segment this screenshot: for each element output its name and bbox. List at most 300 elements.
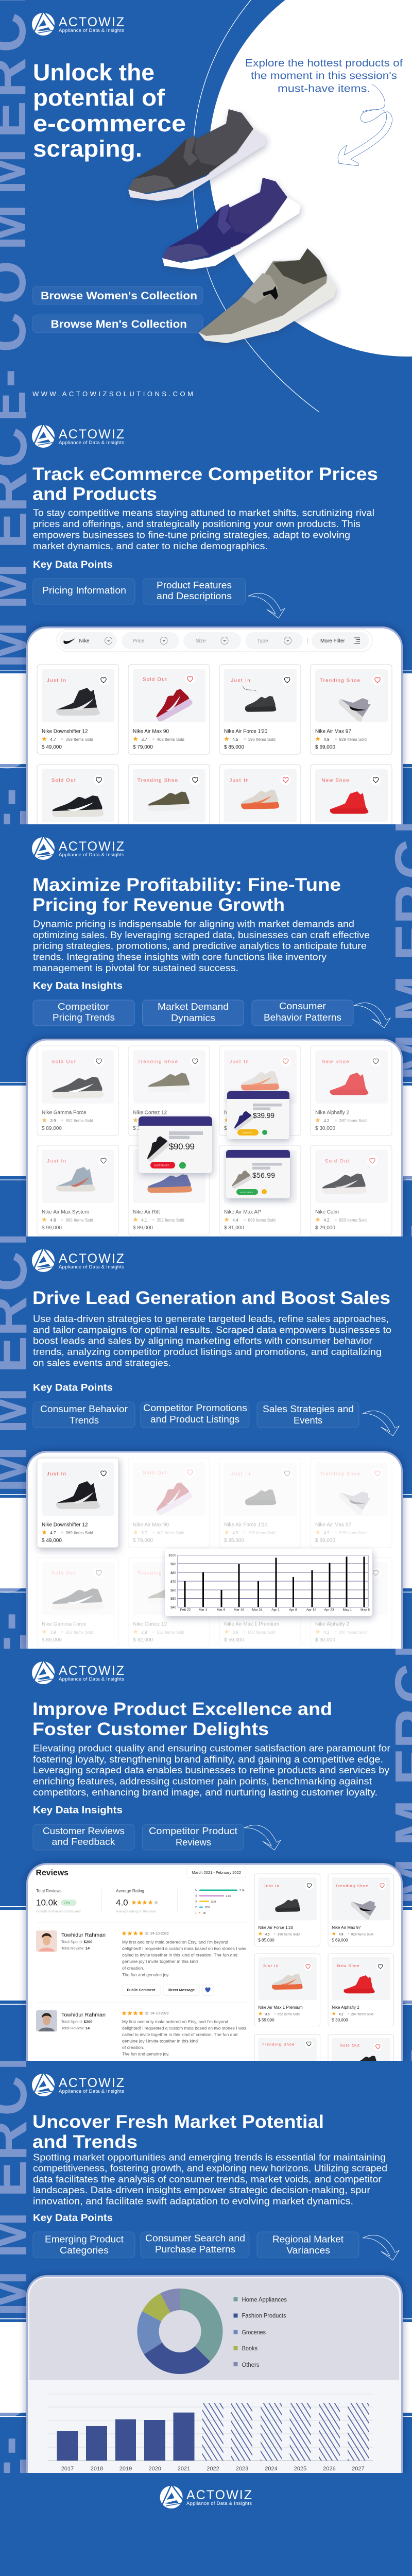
data point: consumer search xyxy=(141,2232,249,2258)
product card: Nike Gamma Force: 3.9 xyxy=(50,1118,56,1123)
section: track competitor prices xyxy=(0,412,412,824)
product card: sold out shoe xyxy=(328,2034,394,2107)
button: men's collection: Browse Men's Collection xyxy=(50,318,187,330)
button: women's collection: Browse Women's Collection xyxy=(41,290,197,302)
price history bar chart: Apr 1 xyxy=(271,1608,280,1612)
review 1: Towhidur Rahman xyxy=(61,1933,106,1938)
filter bar: Price xyxy=(133,638,145,644)
bar chart: 2023 xyxy=(236,2466,248,2472)
body text: trends. Integrating these insights with core functions like inventory xyxy=(33,951,327,962)
data point: regional variances: Variances xyxy=(286,2245,330,2256)
price history bar chart: Mar 1 xyxy=(199,1608,208,1612)
product card: Nike Air Max 97: 929 Items Sold xyxy=(339,737,367,742)
heading: Track eCommerce Competitor Prices xyxy=(32,464,378,484)
product card: Nike Air Force 1'20: Nike Air Force 1'20 xyxy=(224,1522,268,1528)
price popup: good price: $56.99 xyxy=(252,1171,275,1179)
product card: Nike Air Max 90: $ 79,000 xyxy=(133,1538,153,1544)
data point: competitor promotions xyxy=(141,1402,249,1428)
body text: Use data-driven strategies to generate targeted leads, refine sales approaches, xyxy=(33,1313,389,1324)
body text: pricing strategies, promotions, and predictive analytics to anticipate future xyxy=(33,940,367,951)
date filter: March 2021 - February 2022 xyxy=(192,1870,241,1875)
product card: Nike Alphafly 2 xyxy=(310,765,392,824)
price history bar chart: $70 xyxy=(170,1580,176,1584)
product card: Nike Air Max 90: Nike Air Max 90 xyxy=(133,1522,169,1528)
product card: Nike Gamma Force: Sold Out xyxy=(52,1059,76,1064)
body text: management is pivotal for sustained success. xyxy=(33,962,238,973)
product card: Nike Air Max 90 xyxy=(128,1458,210,1548)
reviews panel xyxy=(26,1863,403,2107)
avatar xyxy=(36,2010,57,2031)
price history bar chart: Apr 23 xyxy=(324,1608,334,1612)
product card: Nike Air Max System: 965 Items Sold xyxy=(66,1218,93,1223)
icon: shoe xyxy=(52,1588,104,1610)
data point: competitor promotions: Competitor Promotions xyxy=(143,1402,247,1413)
product card: Nike Air Max 1 Premium: $ 59,000 xyxy=(258,2018,274,2023)
product card: Nike Alphafly 2 xyxy=(311,1046,392,1136)
logo: Appliance of Data & Insights xyxy=(59,852,124,858)
product card: Nike Downshifter 12 highlighted: 4.7 xyxy=(50,1531,56,1535)
product card: Nike Alphafly 2: $ 30,000 xyxy=(315,1126,335,1131)
data point: product features xyxy=(143,579,245,604)
data insight: market demand: Dynamics xyxy=(171,1012,215,1023)
product card: Nike Calm: 4.2 xyxy=(323,1218,330,1223)
avatar xyxy=(36,1930,57,1952)
stat: total reviews: 10.0k xyxy=(36,1898,58,1907)
product card: Nike Calm xyxy=(311,1145,392,1235)
stat: average rating xyxy=(116,1889,177,1913)
body text: Leveraging scraped data enables businesses to refine products and services by xyxy=(33,1765,390,1775)
icon: shoe xyxy=(156,689,193,721)
review 2: Total Spend: $200 xyxy=(61,2020,92,2024)
data point: emerging categories: Emerging Product xyxy=(45,2234,124,2244)
product card: Nike Air Max System: 4.8 xyxy=(50,1218,56,1223)
product card: Nike Air Max AP: $ 81,000 xyxy=(224,1225,244,1231)
data insight: consumer behavior: Consumer xyxy=(279,1001,326,1011)
icon: shoe xyxy=(344,1975,375,1993)
body text xyxy=(33,1742,390,1798)
product card: Nike Gamma Force: Nike Gamma Force xyxy=(42,1622,87,1627)
product card: Nike Downshifter 12 xyxy=(37,665,118,754)
product card: Nike Air Max 1 Premium xyxy=(219,1046,301,1136)
product card: Nike Cortez 12: 2.9 xyxy=(141,1118,147,1123)
rating breakdown: 3 xyxy=(195,1900,197,1903)
legend: Home Appliances xyxy=(242,2297,287,2303)
body text: prices and offerings, and strategically positioning your own products. This xyxy=(33,518,360,529)
review 1: called to invite together in this kind of creation. The fun and xyxy=(122,1953,237,1958)
review 2: of creation. xyxy=(122,2045,144,2050)
bar chart: 2021 xyxy=(178,2466,190,2472)
product card: Nike Air Max 90: 402 Items Sold xyxy=(157,737,184,742)
price history bar chart: Mar 24 xyxy=(252,1608,263,1612)
body text xyxy=(33,1313,391,1368)
product card: Nike Air Force 1'20: 196 Items Sold xyxy=(278,1933,300,1936)
hero intro text xyxy=(245,58,403,95)
body text: Spotting market opportunities and emerging trends is essential for maintaining xyxy=(33,2151,386,2163)
product card: Nike Downshifter 12: 4.7 xyxy=(50,737,56,742)
price history bar chart: Apr 8 xyxy=(289,1608,297,1612)
product card: Nike Cortez 12: $ 32,000 xyxy=(133,1126,153,1131)
product card: Nike Air Max 1 Premium xyxy=(219,1557,301,1647)
product card: sold out shoe: Sold Out xyxy=(340,2043,359,2048)
logo: ACTOWIZ xyxy=(59,427,124,442)
product card: Nike Cortez 12: $ 32,000 xyxy=(133,1637,153,1643)
product card: Nike Air Max AP: 4.4 xyxy=(233,1218,238,1223)
review 1: Total Spend: $200 xyxy=(61,1939,92,1944)
body text: data facilitates the analysis of consumer trends, market voids, and competitor xyxy=(33,2174,382,2184)
hero title: Unlock the xyxy=(33,59,154,86)
review 2: delighted! I requested a custom mala based on two stones I was xyxy=(122,2026,246,2031)
legend: Books xyxy=(242,2346,258,2352)
shoe: grey trainer xyxy=(198,248,336,343)
product card: Nike Air Rift xyxy=(128,1145,210,1235)
product card: Nike Cortez 12 xyxy=(128,1046,210,1136)
stat: average rating: Average Rating xyxy=(116,1889,144,1893)
price history bar chart: $80 xyxy=(170,1571,176,1575)
product card: Nike Air Max System: Nike Air Max System xyxy=(42,1210,89,1215)
product card: Nike Air Max 90: Sold Out xyxy=(143,677,167,682)
icon: shoe xyxy=(56,1167,95,1192)
body text xyxy=(33,918,370,973)
product card: Nike Air Max 97: Trending Shoe xyxy=(336,1884,368,1888)
product card: Nike Cortez 12: Trending Shoe xyxy=(138,1059,178,1064)
side bands xyxy=(0,1494,412,1592)
product card: Nike Air Max 1 Premium: Nike Air Max 1 Premium xyxy=(224,1622,279,1627)
price popup: good price xyxy=(226,1150,290,1198)
key data heading: Key Data Insights xyxy=(33,1805,123,1816)
hero title: e-commerce xyxy=(33,110,186,137)
product card: Nike Air Max 97 xyxy=(311,665,392,754)
rating breakdown: 1.0k xyxy=(226,1895,231,1898)
review 1: 24-10-2022 xyxy=(150,1932,169,1936)
logo: Appliance of Data & Insights xyxy=(59,2089,124,2094)
price popup: good price: GOOD PRICE xyxy=(240,1191,253,1193)
product card: Nike Air Force 1'20: 4.5 xyxy=(233,1531,238,1535)
data point: consumer behavior trends xyxy=(33,1402,135,1428)
body text: and tailor campaigns for optimal results. Scraped data empowers businesses to xyxy=(33,1324,391,1335)
heading: and Products xyxy=(32,484,157,504)
data insight: competitor reviews: Competitor Product xyxy=(149,1825,237,1836)
product card: Nike Gamma Force: 952 Items Sold xyxy=(66,1118,93,1123)
price history bar chart: Mar 8 xyxy=(217,1608,226,1612)
product card: Nike Alphafly 2: Nike Alphafly 2 xyxy=(315,1622,350,1627)
body text: optimizing sales. By leveraging scraped data, businesses can craft effective xyxy=(33,929,370,940)
logo xyxy=(32,837,124,860)
product card: Nike Air Force 1'20: Just In xyxy=(264,1884,279,1888)
data point: emerging categories: Categories xyxy=(60,2245,109,2256)
review 2: Towhidur Rahman xyxy=(61,2012,106,2018)
data insight: competitor reviews xyxy=(142,1824,244,1850)
shoe: purple slip-on xyxy=(162,178,300,269)
product card: Nike Cortez 12: Trending Shoe xyxy=(138,1570,178,1577)
review 1: Total Review: 14 xyxy=(61,1946,90,1951)
product card: Nike Gamma Force xyxy=(37,765,118,824)
product card: Nike Alphafly 2: $ 30,000 xyxy=(332,2018,348,2023)
product card: Nike Air Force 1'20: 4.5 xyxy=(265,1933,270,1936)
product card: Nike Alphafly 2: New Shoe xyxy=(321,1059,349,1064)
product card: Nike Gamma Force: Nike Gamma Force xyxy=(42,1110,87,1116)
product card: Nike Cortez 12: Trending Shoe xyxy=(138,778,178,783)
logo: ACTOWIZ xyxy=(59,2076,124,2090)
logo xyxy=(32,1662,124,1684)
product card: Nike Air Max 1 Premium: 3.6 xyxy=(233,1118,238,1123)
price popup: overpriced: $90.99 xyxy=(169,1142,195,1151)
bar chart: 2017 xyxy=(61,2466,74,2472)
product card: Nike Air Max 1 Premium: $ 59,000 xyxy=(224,1637,244,1643)
heading: Improve Product Excellence and xyxy=(32,1699,332,1719)
bar chart: 2026 xyxy=(323,2466,336,2472)
price history bar chart: May 8 xyxy=(360,1608,370,1612)
body text xyxy=(33,2151,387,2206)
product card: Nike Air Max System: $ 99,000 xyxy=(42,1225,62,1231)
bar chart: 2018 xyxy=(91,2466,103,2472)
product card: Nike Air Max 97: Nike Air Max 97 xyxy=(332,1925,361,1930)
body text: Dynamic pricing is indispensable for aligning with market demands and xyxy=(33,918,354,929)
product card: Nike Gamma Force: $ 89,000 xyxy=(42,1126,62,1131)
product card: Nike Alphafly 2: New Shoe xyxy=(337,1963,359,1968)
product card: Nike Alphafly 2: Nike Alphafly 2 xyxy=(332,2005,359,2010)
icon: shoe xyxy=(337,1479,375,1516)
product card: Nike Air Force 1'20: Nike Air Force 1'20 xyxy=(224,728,268,735)
product card: Nike Air Max 90: $ 79,000 xyxy=(133,744,153,750)
product card: Nike Air Force 1'20: $ 85,000 xyxy=(258,1938,274,1943)
product card: Nike Downshifter 12: Nike Downshifter 12 xyxy=(42,728,88,735)
logo: ACTOWIZ xyxy=(59,1251,124,1266)
product card: Nike Air Max 97: 4.9 xyxy=(339,1933,344,1936)
product card: Nike Air Rift: Nike Air Rift xyxy=(133,1210,160,1215)
product card: Nike Calm: 953 Items Sold xyxy=(339,1218,367,1223)
product card: Nike Gamma Force: $ 89,000 xyxy=(42,1637,62,1643)
key data heading: Key Data Insights xyxy=(33,981,123,991)
product card: Nike Cortez 12: 532 Items Sold xyxy=(157,1630,184,1635)
product card: Nike Downshifter 12 highlighted: 369 Items Sold xyxy=(66,1531,93,1535)
data point: consumer search: Purchase Patterns xyxy=(155,2244,235,2255)
product card: Nike Air Max 97: 929 Items Sold xyxy=(339,1531,367,1535)
product card: Nike Downshifter 12 highlighted: Nike Downshifter 12 xyxy=(42,1522,88,1528)
date filter xyxy=(187,1867,246,1878)
body text: empowers businesses to fine-tune pricing strategies, adapt to evolving xyxy=(33,530,350,540)
filter bar: Size xyxy=(196,638,206,644)
heading xyxy=(32,875,341,915)
side bands xyxy=(0,670,412,768)
filter bar: Type xyxy=(257,638,268,644)
review 1 xyxy=(36,1930,246,1996)
product card: Nike Air Force 1'20: $ 85,000 xyxy=(224,1538,244,1544)
icon: shoe xyxy=(330,1073,368,1095)
product card: Nike Calm: Sold Out xyxy=(325,1158,349,1164)
heading xyxy=(32,1699,332,1739)
icon: shoe xyxy=(350,1891,380,1921)
stat: total reviews xyxy=(36,1889,102,1913)
data point: product features: Product Features xyxy=(157,580,232,590)
data insight: consumer behavior xyxy=(252,1000,353,1026)
body text: competitors, enhancing brand image, and nurturing lasting customer loyalty. xyxy=(33,1787,377,1798)
product card: Nike Air Max 97: Trending Shoe xyxy=(320,1471,360,1477)
stat: total reviews: 21% xyxy=(64,1902,71,1905)
data insight: customer reviews: and Feedback xyxy=(52,1836,115,1847)
icon: shoe xyxy=(148,791,191,811)
data insight: competitor pricing: Competitor xyxy=(58,1001,109,1012)
product card: Nike Air Force 1'20: 4.5 xyxy=(233,737,238,742)
product card: Nike Air Max 97: 929 Items Sold xyxy=(351,1933,373,1936)
product panel xyxy=(26,1039,403,1236)
price history bar chart: Apr 16 xyxy=(306,1608,316,1612)
data point: sales strategies xyxy=(257,1402,359,1428)
product card: Nike Air Max 1 Premium: 652 Items Sold xyxy=(248,1630,276,1635)
hero title xyxy=(33,59,186,162)
product card: Nike Air Force 1'20: Nike Air Force 1'20 xyxy=(258,1925,294,1930)
product card: Nike Downshifter 12 highlighted xyxy=(37,1458,118,1548)
icon: shoe xyxy=(148,1073,191,1092)
product card: Nike Alphafly 2: Nike Alphafly 2 xyxy=(315,1110,350,1116)
icon: shoe xyxy=(245,1489,276,1505)
icon: shoe xyxy=(148,1585,191,1604)
icon: curly arrow xyxy=(338,84,392,166)
logo: ACTOWIZ xyxy=(59,15,124,29)
logo xyxy=(160,2486,252,2509)
data point: competitor promotions: and Product Listings xyxy=(150,1414,239,1425)
data insight: competitor pricing: Pricing Trends xyxy=(53,1012,115,1023)
product card: Nike Air Force 1'20 xyxy=(219,665,301,754)
body text: To stay competitive means staying attuned to market shifts, scrutinizing rival xyxy=(33,507,374,518)
white circle backdrop xyxy=(209,0,412,357)
data insight: market demand xyxy=(142,1000,244,1026)
data insight: customer reviews: Customer Reviews xyxy=(43,1825,125,1836)
body text: competitiveness, fostering growth, and exploring new horizons. Utilizing scraped xyxy=(33,2163,387,2173)
product card: Nike Downshifter 12: $ 49,000 xyxy=(42,744,62,750)
body text: trends, analyzing competitor product listings and promotions, and capitalizing xyxy=(33,1346,382,1357)
arrow xyxy=(248,594,285,618)
legend: Others xyxy=(242,2362,260,2368)
product card: Nike Air Max 97: 4.9 xyxy=(323,737,330,742)
heading: Uncover Fresh Market Potential xyxy=(32,2112,324,2132)
product card: Nike Air Max 97: 4.9 xyxy=(323,1531,330,1535)
section: call to action and contact xyxy=(0,2473,412,2576)
product card: Nike Downshifter 12 highlighted: $ 49,000 xyxy=(42,1538,62,1544)
logo: Appliance of Data & Insights xyxy=(186,2501,252,2506)
product card: Nike Alphafly 2: 287 Items Sold xyxy=(351,2012,373,2016)
price popup: overpriced: OVERPRICED xyxy=(154,1164,170,1166)
data insight: competitor pricing xyxy=(33,1000,134,1026)
data insight: market demand: Market Demand xyxy=(158,1001,229,1012)
product card: Nike Air Max System: Just In xyxy=(47,1158,66,1164)
product card: Nike Air Force 1'20: $ 85,000 xyxy=(224,744,244,750)
price popup: overpriced xyxy=(139,1116,212,1173)
icon: shoe xyxy=(275,1899,300,1912)
body text: fostering loyalty, strengthening brand affinity, and gaining a competitive edge. xyxy=(33,1754,383,1765)
review 2: 24-10-2022 xyxy=(150,2012,169,2015)
section: maximize profitability xyxy=(0,824,412,1236)
price history bar chart: Mar 16 xyxy=(234,1608,244,1612)
product card: Nike Air Max 1 Premium: 652 Items Sold xyxy=(248,1118,276,1123)
product panel xyxy=(26,1451,403,1649)
product card: Nike Air Max 90: 402 Items Sold xyxy=(157,1531,184,1535)
product card: Nike Air Max 1 Premium xyxy=(254,1954,320,2026)
data insight: consumer behavior: Behavior Patterns xyxy=(264,1012,341,1023)
hero intro text: must-have items. xyxy=(278,83,370,95)
product card: Nike Air Max 97: $ 69,000 xyxy=(315,744,335,750)
body text: Elevating product quality and ensuring customer satisfaction are paramount for xyxy=(33,1742,390,1754)
product card: Nike Air Max 1 Premium: Just In xyxy=(230,1059,248,1064)
donut chart xyxy=(137,2289,223,2374)
product card: Nike Gamma Force: Sold Out xyxy=(52,1570,76,1577)
product card: Nike Gamma Force: Sold Out xyxy=(52,778,76,783)
rating breakdown: 0k xyxy=(203,1912,206,1915)
product card: Nike Air Force 1'20: Just In xyxy=(231,678,250,683)
review 1: of creation. xyxy=(122,1966,144,1971)
review 1: The fun and genuine joy. xyxy=(122,1973,169,1977)
price history bar chart xyxy=(165,1549,372,1616)
hero intro text: the moment in this session's xyxy=(251,70,397,81)
product card: Nike Air Force 1'20: 196 Items Sold xyxy=(248,737,276,742)
product card: Nike Air Max 1 Premium: 3.6 xyxy=(233,1630,238,1635)
product card: Nike Downshifter 12: Just In xyxy=(47,678,66,683)
product card: Nike Alphafly 2: New Shoe xyxy=(321,1570,349,1577)
review 2: Total Review: 14 xyxy=(61,2026,90,2030)
logo: Appliance of Data & Insights xyxy=(59,28,124,33)
body text: enriching features, addressing customer pain points, benchmarking against xyxy=(33,1775,372,1787)
data point: product features: and Descriptions xyxy=(157,590,232,601)
data point: emerging categories xyxy=(33,2232,135,2258)
product card: Nike Air Max 97: Trending Shoe xyxy=(320,678,360,683)
logo xyxy=(32,13,124,36)
review 1: delighted! I requested a custom mala based on two stones I was xyxy=(122,1946,246,1951)
button: women's collection xyxy=(32,286,203,304)
product card: Nike Air Max 90: Sold Out xyxy=(143,1470,167,1476)
price history bar chart: $40 xyxy=(170,1606,176,1609)
data point: consumer behavior trends: Trends xyxy=(70,1415,99,1426)
product card: Nike Gamma Force xyxy=(37,1557,118,1647)
arrow xyxy=(354,1003,390,1028)
product card: Nike Air Max 1 Premium xyxy=(219,765,301,824)
product card: Nike Air Max 97: Nike Air Max 97 xyxy=(315,728,351,735)
product card: Nike Gamma Force: 952 Items Sold xyxy=(66,1630,93,1635)
key data heading: Key Data Points xyxy=(33,2213,113,2224)
rating breakdown: 2 xyxy=(195,1906,197,1909)
review 1: My first and only mala ordered on Etsy, and I'm beyond xyxy=(122,1940,228,1944)
icon: shoe xyxy=(56,1481,100,1509)
price popup: cheapest: $39.99 xyxy=(253,1111,274,1120)
stat: total reviews: Total Reviews xyxy=(36,1889,61,1893)
product card: Nike Alphafly 2: $ 30,000 xyxy=(315,1637,335,1643)
rating breakdown: 1 xyxy=(195,1911,197,1914)
product card: Nike Air Max System xyxy=(37,1145,118,1235)
body text xyxy=(33,507,374,551)
logo xyxy=(32,1249,124,1272)
product card: Nike Air Max 1 Premium: $ 59,000 xyxy=(224,1126,244,1131)
product card: Nike Air Max 97: $ 69,000 xyxy=(332,1938,348,1943)
price history bar chart: Feb 22 xyxy=(180,1608,191,1612)
product card: Nike Air Max 97 xyxy=(311,1458,392,1548)
icon: shoe xyxy=(241,1583,279,1602)
logo: Appliance of Data & Insights xyxy=(59,1264,124,1270)
product card: Nike Alphafly 2: 4.2 xyxy=(339,2012,344,2016)
product card: Nike Air Force 1'20: Just In xyxy=(231,1471,250,1477)
product card: Nike Air Max AP: 839 Items Sold xyxy=(248,1218,276,1223)
review 2: called to invite together in this kind of creation. The fun and xyxy=(122,2032,237,2037)
body text: boost leads and sales by aligning marketing efforts with consumer behavior xyxy=(33,1335,372,1346)
section: hero xyxy=(0,0,412,428)
donut chart panel xyxy=(29,2278,399,2380)
arrow xyxy=(244,1825,281,1850)
legend: Groceries xyxy=(242,2330,266,2336)
product card: Nike Air Force 1'20: 196 Items Sold xyxy=(248,1531,276,1535)
data point: pricing information xyxy=(33,579,135,604)
product card: Nike Alphafly 2: 4.2 xyxy=(323,1630,330,1635)
product card: trending shoe xyxy=(254,2034,320,2107)
product card: Nike Cortez 12: 532 Items Sold xyxy=(157,1118,184,1123)
logo: Appliance of Data & Insights xyxy=(59,440,124,446)
product card: Nike Air Force 1'20 xyxy=(254,1874,320,1946)
